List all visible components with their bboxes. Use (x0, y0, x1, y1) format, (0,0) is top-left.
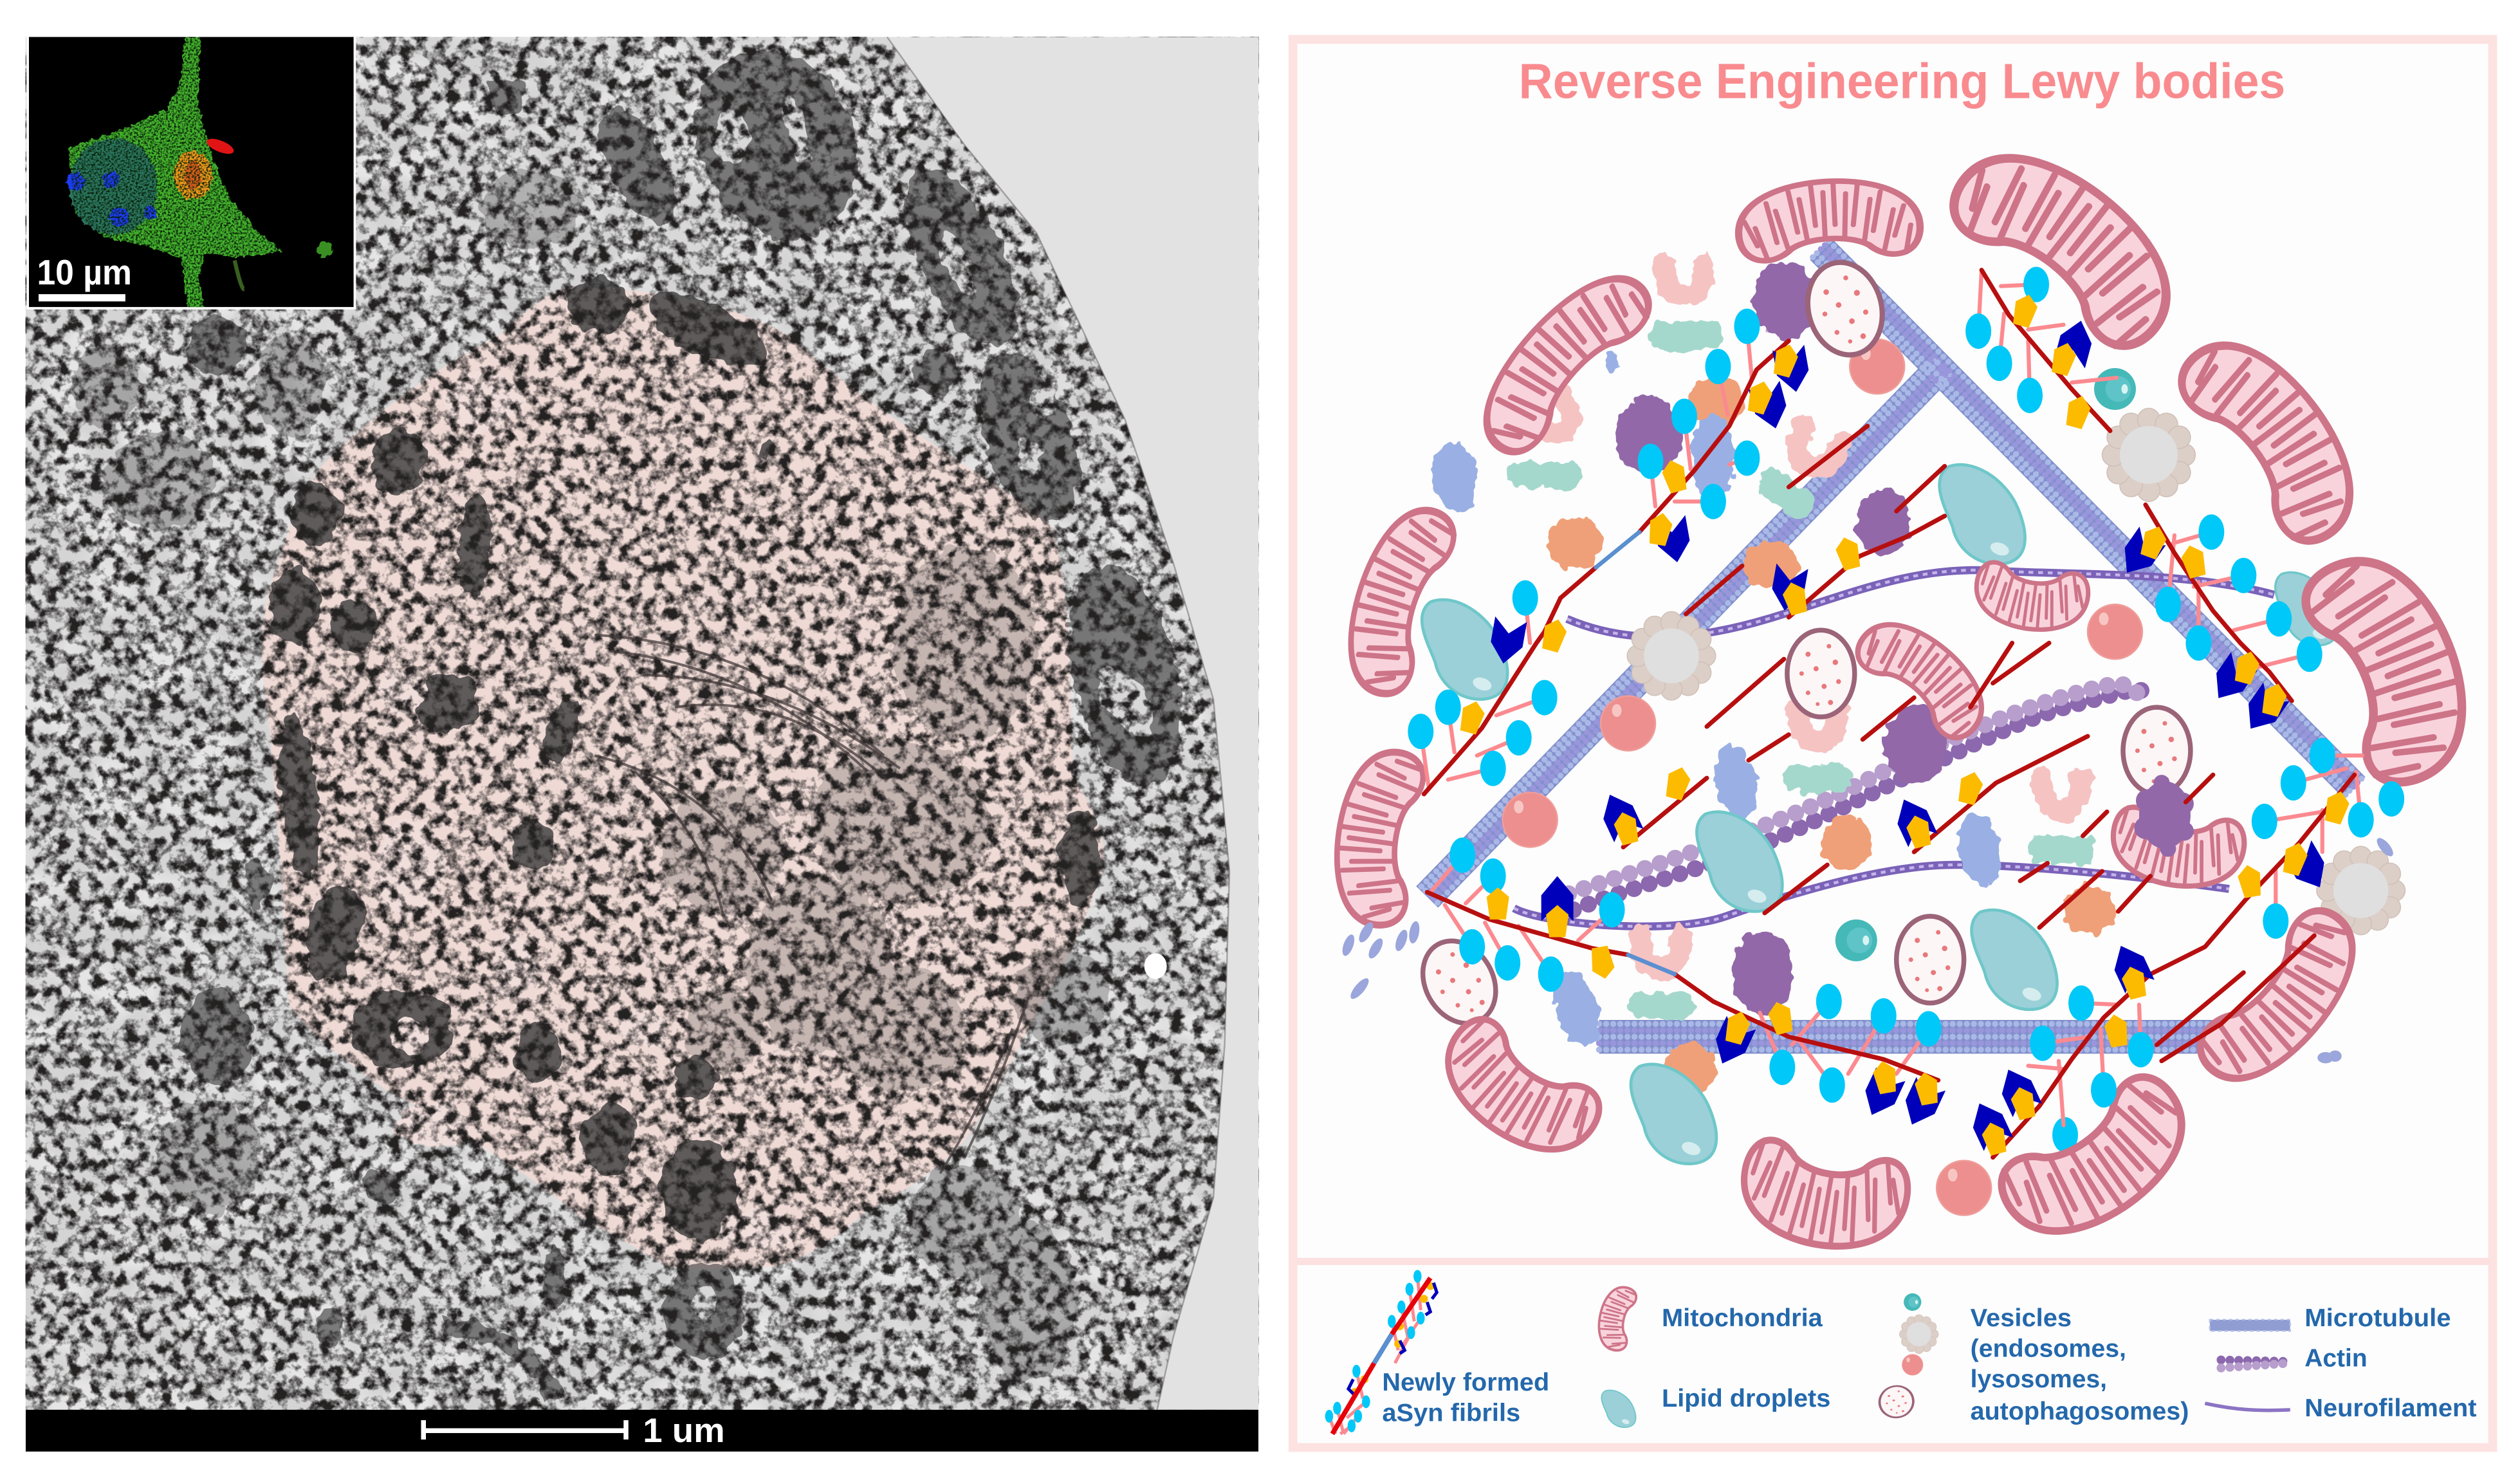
navy chevrons (1487, 317, 2334, 1151)
legend label: vesicles: Vesicles (1971, 1304, 2072, 1332)
legend label: microtubule: Microtubule (2304, 1304, 2451, 1332)
legend label: actin: Actin (2304, 1344, 2368, 1372)
legend label: vesicles: lysosomes, (1971, 1365, 2107, 1393)
legend icons: vesicles (1877, 1293, 1938, 1420)
actin filament (1568, 685, 2146, 910)
lipid droplets (1422, 465, 2338, 1164)
legend label: neurofilament: Neurofilament (2304, 1394, 2477, 1422)
orange aggregate (174, 151, 212, 199)
blue nucleoli (67, 172, 157, 227)
fibrillar arcs inside Lewy body (594, 635, 1029, 1174)
legend icon: neurofilament (2205, 1403, 2290, 1411)
legend label: newly formed aSyn fibrils: Newly formed (1382, 1369, 1549, 1396)
protein aggregates: purple, orange, blue, mint, pink (1426, 262, 2115, 1093)
Lewy body pink region (262, 286, 1104, 1269)
cyan fibril heads (1408, 267, 2404, 1107)
legend icon: actin (2221, 1360, 2290, 1368)
scale bar strip: 1 um: 1 um (643, 1412, 725, 1450)
legend label: mitochondria: Mitochondria (1662, 1304, 1823, 1332)
autophagosomes (1408, 254, 2191, 1037)
grain over neuron (64, 37, 290, 310)
nucleus (69, 138, 158, 235)
organelles in micrograph (72, 24, 1199, 1398)
legend label: lipid droplets: Lipid droplets (1662, 1385, 1830, 1412)
scale bar strip: 1 um (26, 1410, 1258, 1452)
pink stalks of aSyn fibrils (1421, 270, 2362, 1125)
panel: Lewy body schematic frame (1293, 39, 2493, 1448)
legend (1325, 1270, 2477, 1434)
green neuron body (69, 37, 283, 309)
white hole in micrograph (1145, 953, 1167, 979)
neurofilaments (1514, 570, 2274, 927)
alpha-synuclein fibrils (1424, 270, 2355, 1158)
left figure: electron micrograph with inset (26, 36, 1258, 1452)
purple aggregate over mitochondrion (2134, 775, 2194, 856)
legend icon: lipid droplet (1601, 1390, 1636, 1427)
legend label: vesicles: autophagosomes) (1971, 1398, 2189, 1425)
legend label: vesicles (1971, 1304, 2189, 1425)
cyan head partly behind lower mitochondrion (2052, 1117, 2078, 1152)
stray tubulin fragments (1340, 835, 2396, 1063)
red and teal vesicles (1503, 339, 2142, 1216)
legend label: vesicles: (endosomes, (1971, 1335, 2126, 1362)
legend label: newly formed aSyn fibrils (1382, 1369, 1549, 1427)
legend icon: mitochondrion (1594, 1284, 1638, 1353)
mitochondria (1327, 124, 2491, 1261)
title: Reverse Engineering Lewy bodies (1519, 53, 2285, 109)
inset: fluorescence image of neuron: 10 µm (37, 252, 132, 292)
red streak (205, 136, 235, 157)
legend label: newly formed aSyn fibrils: aSyn fibrils (1382, 1399, 1520, 1427)
panel: electron micrograph (26, 24, 1258, 1410)
endosome ring vesicles (1627, 409, 2405, 935)
legend icon: newly formed fibril (1325, 1270, 1437, 1434)
blue fibril segments (1596, 532, 1675, 974)
microtubules (1419, 241, 2362, 1050)
bright background outside the cell (887, 37, 1258, 1410)
legend icon: microtubule (2210, 1320, 2290, 1331)
yellow pentagons (1457, 291, 2352, 1156)
inset: fluorescence image of neuron (26, 35, 356, 310)
